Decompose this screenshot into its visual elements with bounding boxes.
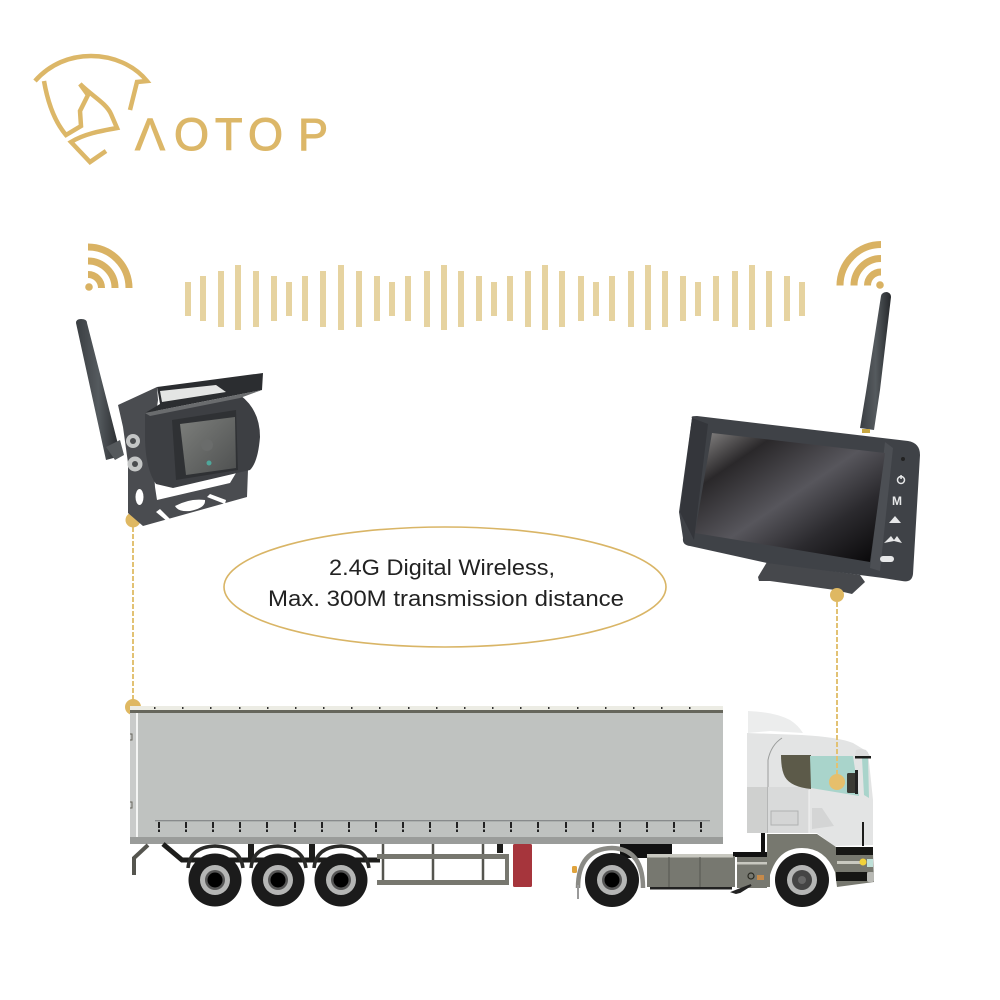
bracket cut-outs [156, 494, 226, 522]
monitor hood edge [680, 418, 708, 540]
icon: left wifi signal [85, 247, 129, 291]
rail rivets [154, 707, 690, 709]
camera antenna [76, 319, 124, 460]
tractor rear fender [572, 848, 643, 899]
trailer undercarriage [134, 844, 532, 887]
wordmark: ΛOTOP [135, 109, 328, 160]
monitor antenna [860, 292, 891, 433]
rear-view camera [76, 319, 263, 526]
side guard [377, 844, 509, 885]
monitor buttons [880, 457, 905, 562]
wind deflector [748, 711, 803, 733]
lens panel [172, 410, 238, 480]
camera bracket [118, 387, 248, 526]
fenders [188, 846, 369, 868]
logo: AOTOP [35, 56, 328, 162]
icon: horse head emblem [35, 56, 147, 162]
camera sun hood [145, 373, 263, 413]
tractor chassis [620, 833, 771, 893]
battery box [737, 857, 767, 888]
connector: camera to trailer [125, 512, 141, 715]
red mudflap [513, 844, 532, 887]
monitor body [679, 416, 920, 581]
mounting bolts [126, 434, 142, 472]
sun visor [855, 749, 871, 758]
truck [130, 706, 874, 907]
tractor rear wheel [585, 853, 639, 907]
tractor cab [747, 711, 873, 846]
trailer wheel 3 [314, 854, 368, 906]
camera body [145, 395, 260, 488]
trailer wheel 2 [252, 854, 304, 906]
monitor buttons: M [892, 494, 902, 508]
connector: monitor to cab [829, 588, 845, 790]
trailer box [130, 706, 723, 844]
trailer wheel 1 [188, 854, 242, 906]
signal wave bars [185, 265, 805, 330]
text bubble [224, 527, 666, 647]
tractor bumper [767, 834, 874, 887]
icon: right wifi signal [840, 244, 884, 289]
tractor front wheel [775, 853, 829, 907]
bubble text line 1: 2.4G Digital Wireless, [329, 555, 555, 580]
monitor [679, 292, 920, 594]
curtain buckles [159, 822, 701, 832]
monitor screen [695, 433, 885, 562]
bubble text line 2: Max. 300M transmission distance [268, 586, 624, 611]
cab window [781, 755, 869, 798]
monitor stand [758, 562, 865, 594]
fuel tank [647, 854, 735, 890]
